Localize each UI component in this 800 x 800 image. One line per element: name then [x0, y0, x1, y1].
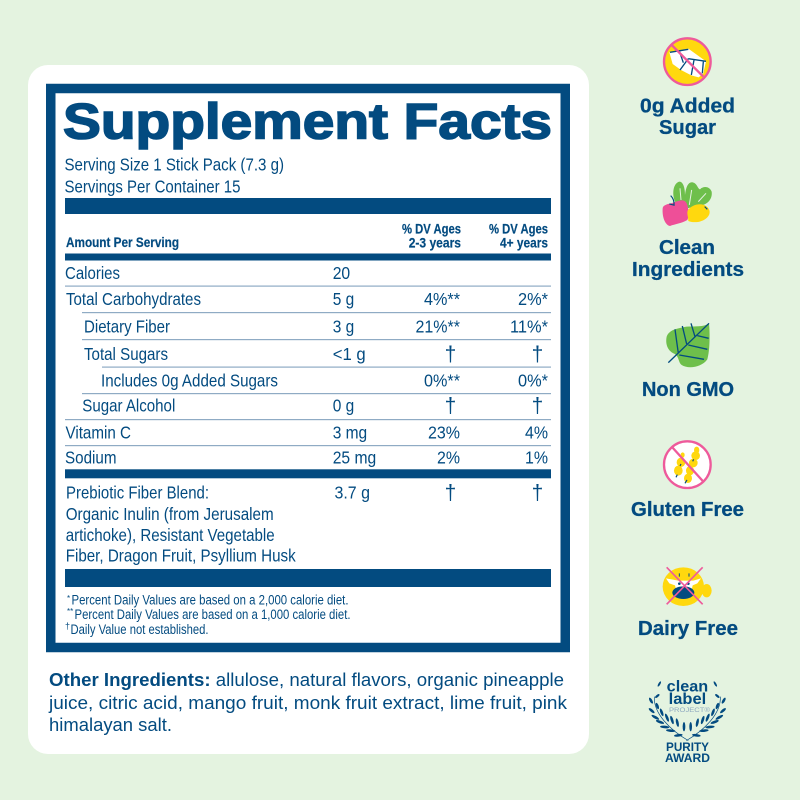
nutrient table rows: 20	[333, 263, 350, 283]
nutrient table rows	[65, 263, 548, 467]
nutrient table rows: Sodium	[65, 447, 116, 467]
serving information: Serving Size 1 Stick Pack (7.3 g)	[64, 154, 284, 174]
table column headers: Amount Per Serving	[66, 235, 179, 250]
badge: clean ingredients: Ingredients	[632, 259, 744, 281]
nutrient table rows: 21%**	[416, 316, 460, 336]
nutrient table rows: 2%*	[518, 289, 548, 309]
badge: 0g added sugar: Sugar	[659, 117, 716, 139]
footnotes: **	[67, 607, 73, 616]
nutrient table rows: 3 mg	[333, 422, 367, 442]
nutrient row rules	[65, 286, 551, 446]
table column headers: % DV Ages	[489, 221, 548, 236]
nutrient table rows: 0%**	[424, 370, 460, 390]
top thick bar	[65, 198, 551, 214]
badge: clean label project purity award: AWARD	[665, 753, 710, 765]
footnotes: Percent Daily Values are based on a 1,000 calorie diet.	[74, 607, 350, 622]
nutrient table rows: 4%	[525, 422, 548, 442]
nutrient table rows: Total Sugars	[84, 344, 168, 364]
nutrient table rows: <1 g	[333, 344, 366, 364]
nutrient table rows: †	[532, 394, 543, 418]
prebiotic fiber blend: Fiber, Dragon Fruit, Psyllium Husk	[66, 546, 296, 566]
nutrient table rows: 25 mg	[333, 447, 376, 467]
footnotes: Percent Daily Values are based on a 2,000 calorie diet.	[72, 592, 348, 608]
table column headers: 4+ years	[500, 235, 548, 250]
prebiotic fiber blend: artichoke), Resistant Vegetable	[66, 525, 275, 545]
badge: 0g added sugar	[640, 38, 735, 139]
nutrient table rows: 23%	[428, 422, 460, 442]
badge: clean label project purity award: PURITY	[666, 742, 709, 754]
icon: laurel wreath	[648, 681, 727, 741]
nutrient table rows: 5 g	[333, 289, 354, 309]
bottom thick bar	[65, 569, 551, 587]
footnotes: †	[65, 621, 70, 631]
prebiotic fiber blend: †	[532, 482, 543, 504]
table column headers	[66, 221, 548, 250]
icon: green leaf	[666, 323, 710, 367]
badge: clean label project purity award	[648, 679, 727, 765]
badge: clean ingredients: Clean	[659, 237, 715, 259]
serving information	[64, 154, 284, 196]
nutrient table rows: Calories	[65, 263, 120, 283]
badge: gluten free	[631, 441, 744, 521]
badge: 0g added sugar: 0g Added	[640, 96, 735, 118]
nutrient table rows: 0 g	[333, 396, 354, 416]
footnotes: Daily Value not established.	[70, 622, 208, 637]
nutrient table rows: Includes 0g Added Sugars	[101, 370, 278, 390]
facts label frame	[51, 88, 565, 648]
nutrient table rows: 3 g	[333, 316, 354, 336]
nutrient table rows: †	[532, 343, 543, 366]
nutrient table rows: Sugar Alcohol	[82, 396, 175, 416]
panel: supplement facts card	[28, 65, 589, 754]
icon: crossed-out sugar cubes	[664, 38, 711, 85]
nutrient table rows: Total Carbohydrates	[66, 289, 201, 309]
nutrient table rows: 2%	[437, 447, 460, 467]
badge: clean ingredients	[632, 182, 744, 281]
nutrient table rows: 4%**	[424, 289, 460, 309]
nutrient table rows: †	[445, 343, 456, 366]
table column headers: % DV Ages	[402, 221, 461, 236]
badge: non GMO: Non GMO	[642, 379, 734, 401]
badge: gluten free: Gluten Free	[631, 499, 744, 521]
badge: dairy free	[638, 567, 738, 640]
middle thick bar	[65, 469, 551, 478]
other ingredients: himalayan salt.	[49, 715, 172, 735]
prebiotic fiber blend	[66, 482, 543, 566]
badge: clean label project purity award: PROJECT®	[669, 706, 710, 714]
nutrient table rows: 1%	[525, 447, 548, 467]
nutrient table rows: Dietary Fiber	[84, 316, 170, 336]
nutrient table rows: Vitamin C	[66, 422, 131, 442]
other ingredients	[48, 670, 568, 735]
header rule	[65, 254, 551, 260]
icon: crossed-out wheat	[664, 441, 711, 488]
footnotes: *	[67, 594, 70, 603]
prebiotic fiber blend: †	[445, 482, 456, 504]
nutrient table rows: 0%*	[518, 370, 548, 390]
nutrient table rows: 11%*	[510, 316, 548, 336]
icon: crossed-out cow	[663, 567, 712, 606]
footnotes	[65, 592, 350, 637]
title: Supplement Facts	[63, 94, 552, 150]
nutrient table rows: †	[445, 394, 456, 418]
badge: non GMO	[642, 323, 734, 401]
other ingredients: juice, citric acid, mango fruit, monk fruit extract, lime fruit, pink	[48, 693, 568, 713]
prebiotic fiber blend: Prebiotic Fiber Blend:	[66, 482, 209, 502]
badge: dairy free: Dairy Free	[638, 618, 738, 640]
badge: clean label project purity award: label	[669, 691, 706, 708]
prebiotic fiber blend: 3.7 g	[334, 482, 370, 502]
badge: clean label project purity award: clean	[667, 679, 708, 696]
prebiotic fiber blend: Organic Inulin (from Jerusalem	[66, 504, 274, 524]
icon: apple, lemon and leafy greens	[663, 182, 712, 226]
table column headers: 2-3 years	[409, 235, 461, 250]
serving information: Servings Per Container 15	[64, 176, 240, 196]
other ingredients: Other Ingredients: allulose, natural flavors, organic pineapple	[49, 670, 564, 690]
